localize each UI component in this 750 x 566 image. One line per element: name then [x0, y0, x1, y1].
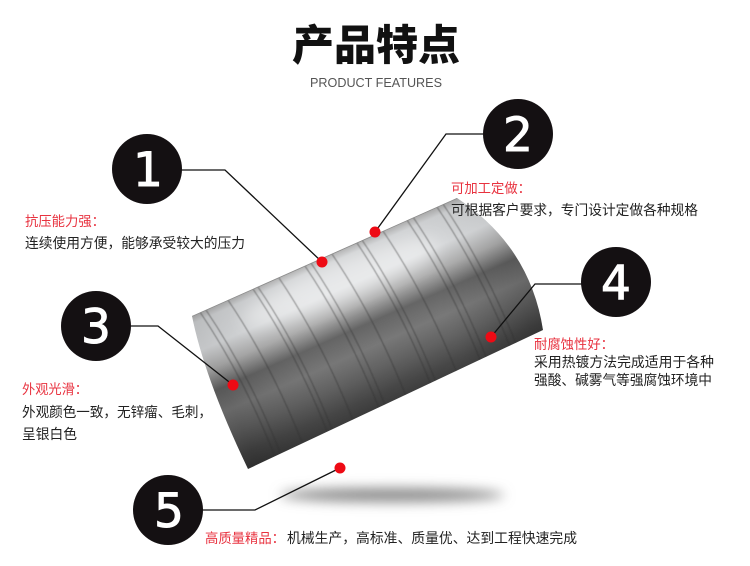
number badge 2: [483, 99, 553, 169]
subtitle: PRODUCT FEATURES: [310, 75, 442, 90]
number badge 2: 2: [503, 108, 533, 163]
number badge 1: 1: [133, 143, 163, 198]
number badge 4: [581, 247, 651, 317]
number badge 4: 4: [601, 256, 631, 311]
feature 1 text: [25, 214, 245, 251]
feature 2 text: [451, 181, 698, 218]
red dot 1: [316, 256, 328, 268]
number badge 5: 5: [154, 484, 184, 539]
feature 2 text: 可根据客户要求，专门设计定做各种规格: [451, 202, 698, 218]
feature 3 text: 外观颜色一致，无锌瘤、毛刺，: [22, 404, 212, 420]
floor shadow: [280, 488, 504, 502]
number badge 5: [133, 475, 203, 545]
title: 产品特点: [292, 22, 460, 69]
feature 2 text: 可加工定做：: [451, 181, 531, 196]
feature 1 text: 抗压能力强：: [25, 214, 105, 229]
number badge 3: 3: [81, 300, 111, 355]
number badge 1: [112, 134, 182, 204]
feature 5 text: 机械生产，高标准、质量优、达到工程快速完成: [287, 530, 577, 546]
feature 4 text: 采用热镀方法完成适用于各种: [534, 354, 714, 370]
feature 3 text: 呈银白色: [22, 426, 77, 442]
number badge 3: [61, 291, 131, 361]
feature 5 text: 高质量精品：: [205, 530, 285, 546]
leader line 5: [202, 468, 340, 510]
feature 3 text: 外观光滑：: [22, 382, 88, 397]
leader line 2: [375, 134, 484, 232]
red dot 5: [334, 462, 346, 474]
red dot 2: [370, 226, 380, 238]
feature 4 text: [534, 337, 714, 388]
feature 4 text: 强酸、碱雾气等强腐蚀环境中: [534, 372, 712, 388]
steel spiral pipe: [192, 198, 543, 469]
feature 3 text: [22, 382, 212, 442]
red dot 3: [228, 380, 238, 390]
feature 1 text: 连续使用方便，能够承受较大的压力: [25, 235, 245, 251]
feature 4 text: 耐腐蚀性好：: [534, 337, 614, 352]
red dot 4: [486, 332, 496, 342]
leader line 3: [130, 326, 233, 385]
leader line 1: [181, 170, 322, 262]
leader line 4: [491, 284, 582, 337]
